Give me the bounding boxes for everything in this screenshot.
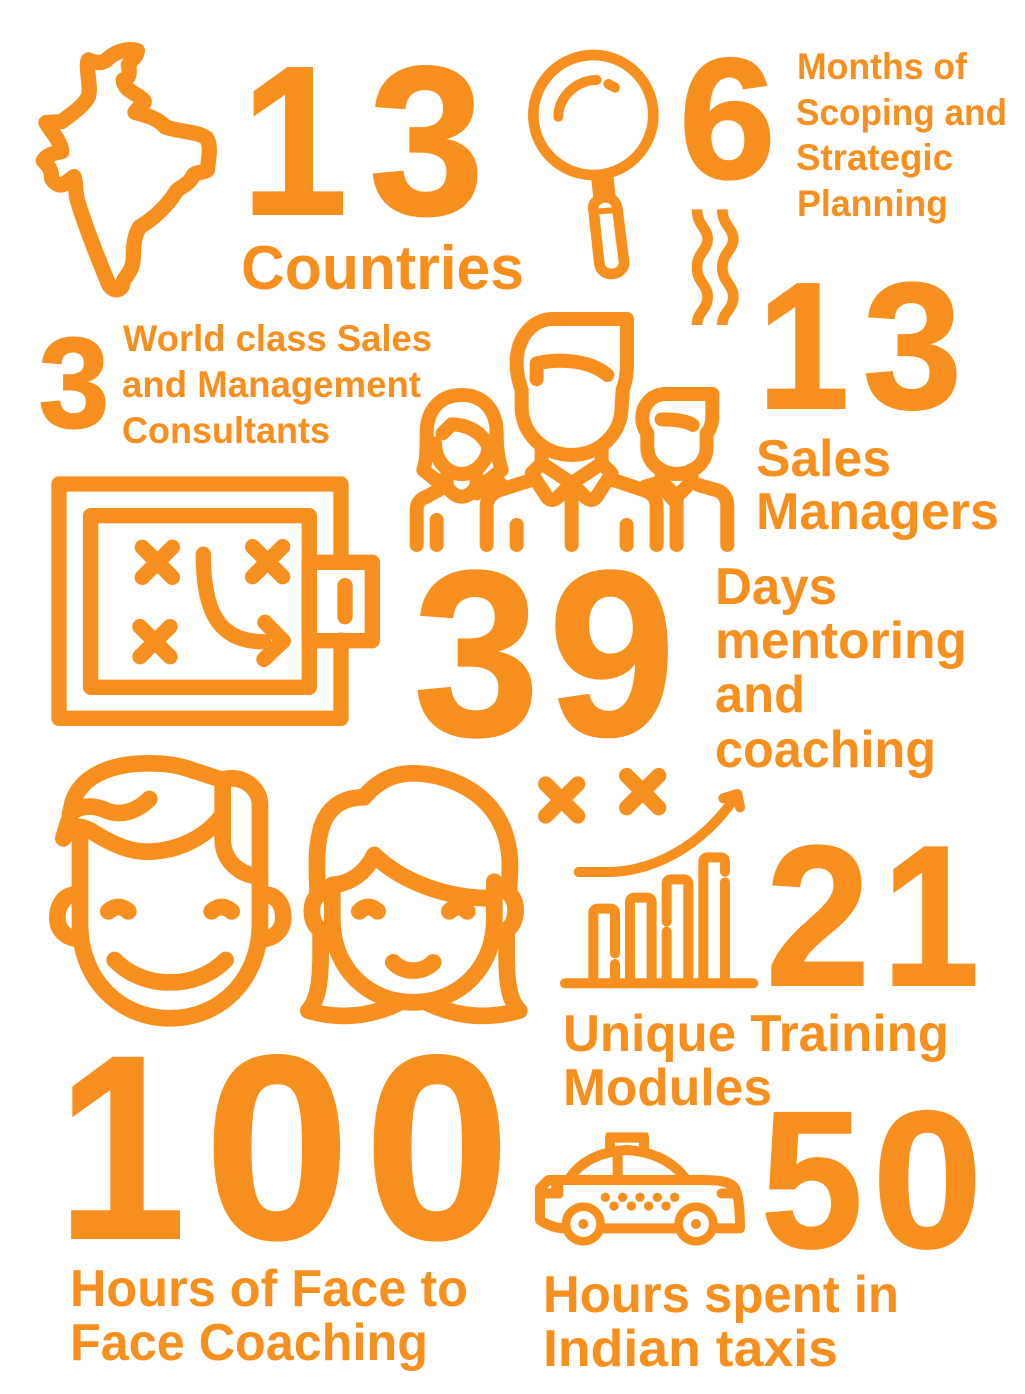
man face bbox=[57, 763, 283, 1018]
play arrow bbox=[203, 554, 283, 659]
stat: 21 Unique Training Modules bbox=[563, 805, 979, 1117]
stat: 6 Months of Scoping and Strategic Planning bbox=[679, 23, 1007, 224]
big man bbox=[487, 319, 657, 545]
stat: 3 World class Sales and Management Consultants: Consultants bbox=[122, 410, 330, 451]
icon: man and woman faces bbox=[57, 763, 519, 1018]
stat: 3 World class Sales and Management Consultants bbox=[39, 312, 432, 455]
stat: 100 Hours of Face to Face Coaching: Hours of Face to bbox=[70, 1260, 468, 1318]
stat: 39 Days mentoring and coaching: coaching bbox=[715, 721, 936, 779]
bars bbox=[565, 857, 753, 983]
stat: 100 Hours of Face to Face Coaching bbox=[58, 1001, 510, 1372]
icon: India map bbox=[43, 50, 209, 290]
stat: 50 Hours spent in Indian taxis: 5 bbox=[761, 1071, 863, 1289]
stat: 13 Sales Managers: 3 bbox=[863, 246, 962, 447]
stat: 13 Countries: Countries bbox=[241, 234, 524, 303]
stat: 100 Hours of Face to Face Coaching: 1 bbox=[58, 1001, 186, 1294]
icon: magnifying glass bbox=[533, 55, 653, 274]
play marks bbox=[140, 547, 283, 657]
stat: 6 Months of Scoping and Strategic Planning: Planning bbox=[797, 183, 948, 224]
stat: 21 Unique Training Modules: Unique Training bbox=[563, 1005, 949, 1063]
stat: 50 Hours spent in Indian taxis: Hours spent in bbox=[543, 1266, 899, 1324]
stat: 13 Countries: 1 bbox=[242, 22, 348, 259]
woman face bbox=[308, 773, 519, 1016]
stat: 6 Months of Scoping and Strategic Planning: Scoping and bbox=[796, 92, 1007, 133]
stat: 39 Days mentoring and coaching: 3 bbox=[413, 522, 539, 786]
small man bbox=[642, 394, 727, 545]
stat: 6 Months of Scoping and Strategic Planning: 6 bbox=[679, 23, 776, 215]
stat: 6 Months of Scoping and Strategic Planning: Strategic bbox=[796, 137, 953, 178]
stat: 50 Hours spent in Indian taxis: 0 bbox=[872, 1071, 982, 1289]
icon: team of three people bbox=[417, 319, 727, 545]
growth arrow bbox=[579, 794, 740, 872]
stat: 3 World class Sales and Management Consultants: World class Sales bbox=[123, 318, 432, 359]
checker dots bbox=[601, 1193, 679, 1211]
stat: 13 Countries bbox=[241, 22, 524, 303]
icon: growth chart with marks bbox=[546, 776, 753, 983]
stat: 100 Hours of Face to Face Coaching: 0 bbox=[204, 1001, 350, 1294]
stat: 39 Days mentoring and coaching: and bbox=[715, 666, 805, 724]
stat: 39 Days mentoring and coaching: Days bbox=[715, 558, 837, 616]
stat: 13 Countries: 3 bbox=[369, 22, 484, 259]
wheels bbox=[566, 1207, 713, 1241]
stat: 13 Sales Managers: Sales bbox=[756, 430, 891, 488]
stat: 13 Sales Managers: Managers bbox=[756, 483, 999, 541]
stat: 13 Sales Managers: 1 bbox=[758, 246, 849, 447]
stat: 100 Hours of Face to Face Coaching: 0 bbox=[364, 1001, 510, 1294]
woman bbox=[417, 395, 502, 545]
stat: 39 Days mentoring and coaching: mentoring bbox=[715, 612, 967, 670]
stat: 6 Months of Scoping and Strategic Planning: Months of bbox=[797, 46, 968, 87]
stat: 39 Days mentoring and coaching bbox=[413, 522, 967, 786]
stat: 100 Hours of Face to Face Coaching: Face Coaching bbox=[70, 1314, 428, 1372]
stat: 39 Days mentoring and coaching: 9 bbox=[548, 522, 675, 786]
icon: wavy steam lines bbox=[697, 209, 733, 325]
crosses bbox=[546, 776, 659, 816]
stat: 3 World class Sales and Management Consultants: 3 bbox=[39, 312, 109, 455]
stat: 21 Unique Training Modules: 1 bbox=[882, 805, 979, 1028]
stat: 13 Sales Managers bbox=[756, 246, 999, 541]
icon: strategy clipboard bbox=[59, 484, 372, 718]
stat: 50 Hours spent in Indian taxis: Indian taxis bbox=[543, 1320, 838, 1378]
icon: taxi bbox=[540, 1133, 740, 1241]
stat: 3 World class Sales and Management Consultants: and Management bbox=[122, 364, 421, 405]
stat: 21 Unique Training Modules: Modules bbox=[563, 1059, 772, 1117]
stat: 21 Unique Training Modules: 2 bbox=[766, 805, 870, 1028]
stat: 50 Hours spent in Indian taxis bbox=[543, 1071, 982, 1378]
